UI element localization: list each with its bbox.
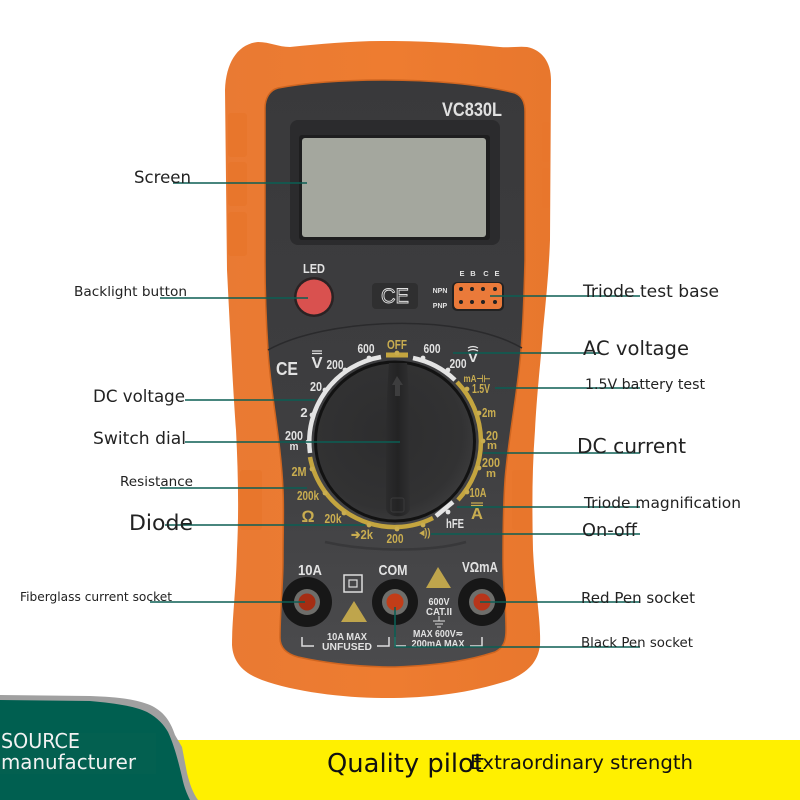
callout labels: Fiberglass current socket [20,589,172,604]
panel curves [268,323,522,550]
input sockets: COM [378,562,408,579]
callout labels: AC voltage [583,337,689,360]
model name: VC830L [442,100,502,121]
LED backlight button [294,261,334,317]
dial labels: current and resistance: A [471,506,483,523]
dial labels: current and resistance: m [486,468,496,480]
dial labels: voltage: 200 [326,357,344,372]
dial labels: voltage: 200 [285,428,303,443]
callout labels: On-off [582,521,638,541]
dial labels: voltage: 200 [450,356,466,371]
triode test socket [433,269,504,311]
callout labels: Switch dial [93,429,186,449]
dial scale rings [309,355,481,527]
callout labels: Black Pen socket [581,636,693,651]
dial labels: current and resistance: mA⊣⊢ [464,374,491,385]
case grips [228,113,550,530]
dial labels: voltage: 600 [358,341,374,356]
dial labels: current and resistance: m [487,440,497,452]
yellow banner [170,740,800,800]
banner text: Extraordinary strength [470,751,693,774]
dial labels: current and resistance: 200 [386,531,404,546]
dial labels: voltage: V [468,349,479,365]
dial labels: voltage: 2 [300,405,308,420]
dial labels: current and resistance: 2m [482,405,496,420]
dial labels: current and resistance: 20k [324,511,342,526]
input sockets: VΩmA [462,559,498,576]
callout labels [20,168,741,651]
dial labels: current and resistance: 10A [470,485,487,500]
dial labels: current and resistance: 1.5V [472,381,490,396]
callout labels: DC current [577,434,686,458]
dial labels: current and resistance: 200 [482,455,500,470]
callout labels: Diode [129,511,193,536]
dial labels: current and resistance [292,374,500,546]
dial labels: voltage: OFF [387,337,407,352]
callout labels: DC voltage [93,387,185,407]
dial labels: current and resistance: 2M [292,464,306,479]
badge text: manufacturer [1,750,137,774]
badge text: SOURCE [1,729,80,753]
input sockets [282,559,506,627]
input sockets: 10A [298,562,322,579]
screen bezel [290,120,500,245]
dial labels: voltage: 600 [424,341,440,356]
dial labels: voltage: V [312,355,323,372]
callout labels: Red Pen socket [581,589,695,607]
callout labels: 1.5V battery test [585,377,706,393]
callout labels: Triode magnification [583,494,741,512]
callout labels: Resistance [120,474,193,490]
warning marks and ratings: 10A MAX [327,632,367,643]
multimeter body [225,41,551,698]
triode test socket: NPN [433,288,447,295]
green source badge [0,695,198,800]
LCD screen [299,135,490,240]
badge text [1,729,137,774]
dial labels: current and resistance: ➔2k [351,527,374,542]
dial labels: voltage [276,337,479,453]
triode test socket: E [459,269,465,278]
banner text [327,749,693,779]
callout labels: Triode test base [582,282,719,302]
dial labels: voltage: 20 [310,379,322,394]
warning marks and ratings [302,567,482,653]
dial labels: current and resistance: 20 [486,428,498,443]
leader lines [150,183,640,647]
triode test socket: C [483,269,489,278]
triode test socket: B [470,269,476,278]
warning marks and ratings: CAT.II [426,606,452,618]
rotary dial knob [314,360,476,522]
callout labels: Backlight button [74,284,187,300]
dark front panel [265,80,525,667]
callout labels: Screen [134,168,191,187]
warning marks and ratings: 200mA MAX [412,638,464,650]
dial labels: current and resistance: Ω [302,507,314,526]
dial tick dots gold [310,351,485,531]
triode test socket: E [494,269,500,278]
warning marks and ratings: MAX 600V≂ [413,628,463,640]
triode test socket: PNP [433,303,448,310]
dial labels: current and resistance: ◂)) [419,527,431,539]
CE plate: CE [381,285,409,308]
dial labels: voltage: m [290,441,299,453]
dial labels: voltage: CE [276,359,298,379]
orange rubber case [225,41,551,698]
LED backlight button: LED [303,261,325,276]
warning marks and ratings: 600V [428,596,450,608]
banner text: Quality pilot [327,749,484,779]
warning marks and ratings: UNFUSED [322,642,372,653]
dial labels: current and resistance: hFE [446,516,464,531]
CE plate [372,283,418,309]
dial labels: current and resistance: 200k [297,488,320,503]
dial tick dots [306,356,450,514]
